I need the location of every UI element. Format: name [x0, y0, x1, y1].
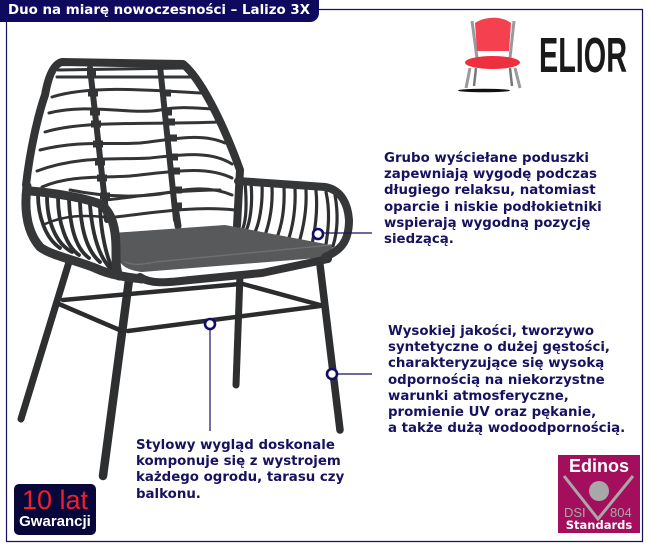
text block: material: charakteryzujące się wysoką — [388, 356, 604, 371]
text block: material: Wysokiej jakości, tworzywo — [388, 324, 594, 339]
seat frame front rail — [140, 259, 328, 282]
chair legs — [21, 262, 340, 476]
badge: Edinos standards: Edinos — [569, 456, 629, 476]
text block: style: każdego ogrodu, tarasu czy — [136, 470, 344, 485]
left armrest spindles — [38, 195, 113, 270]
text block: cushions: oparcie i niskie podłokietniki — [384, 200, 602, 215]
marker: frame bar — [205, 319, 215, 329]
badge: 10 lat gwarancji: Gwarancji — [19, 513, 91, 530]
title bar — [0, 0, 319, 22]
left armrest frame — [30, 191, 119, 276]
text block: material: odpornością na niekorzystne — [388, 373, 605, 388]
text block: style: Stylowy wygląd doskonale — [136, 438, 335, 453]
badge: Edinos standards — [558, 455, 640, 533]
marker: cushion — [313, 229, 323, 239]
badge: Edinos standards: Standards — [566, 518, 632, 532]
text block: material — [388, 324, 625, 436]
text block: material: promienie UV oraz pękanie, — [388, 405, 596, 420]
right armrest spindles — [243, 182, 337, 250]
text block: material: warunki atmosferyczne, — [388, 389, 569, 404]
text block: style: komponuje się z wystrojem — [136, 454, 341, 469]
text block: cushions: długiego relaksu, natomiast — [384, 183, 596, 198]
backrest — [26, 62, 240, 226]
right armrest frame — [238, 181, 349, 257]
text block: material: syntetyczne o dużej gęstości, — [388, 340, 610, 355]
marker: leg — [327, 369, 337, 379]
text block: cushions: siedzącą. — [384, 232, 454, 247]
text block: material: a także dużą wodoodpornością. — [388, 421, 625, 436]
text block: cushions: wspierają wygodną pozycję — [384, 216, 590, 231]
icon: red chair — [458, 18, 520, 92]
text block: cushions — [384, 151, 602, 247]
text block: cushions: Grubo wyściełane poduszki — [384, 151, 589, 166]
text block: cushions: zapewniają wygodę podczas — [384, 167, 597, 182]
badge: 10 lat gwarancji: 10 lat — [22, 485, 88, 515]
seat cushion — [112, 225, 333, 272]
badge: Edinos standards: DSI — [564, 505, 586, 520]
badge: Edinos standards: 804 — [610, 505, 632, 520]
text block: style: balkonu. — [136, 487, 201, 502]
badge: 10 lat gwarancji — [14, 484, 96, 535]
cross bars — [59, 284, 320, 331]
text block: style — [136, 438, 344, 502]
title bar: Duo na miarę nowoczesności – Lalizo 3X — [8, 3, 310, 18]
